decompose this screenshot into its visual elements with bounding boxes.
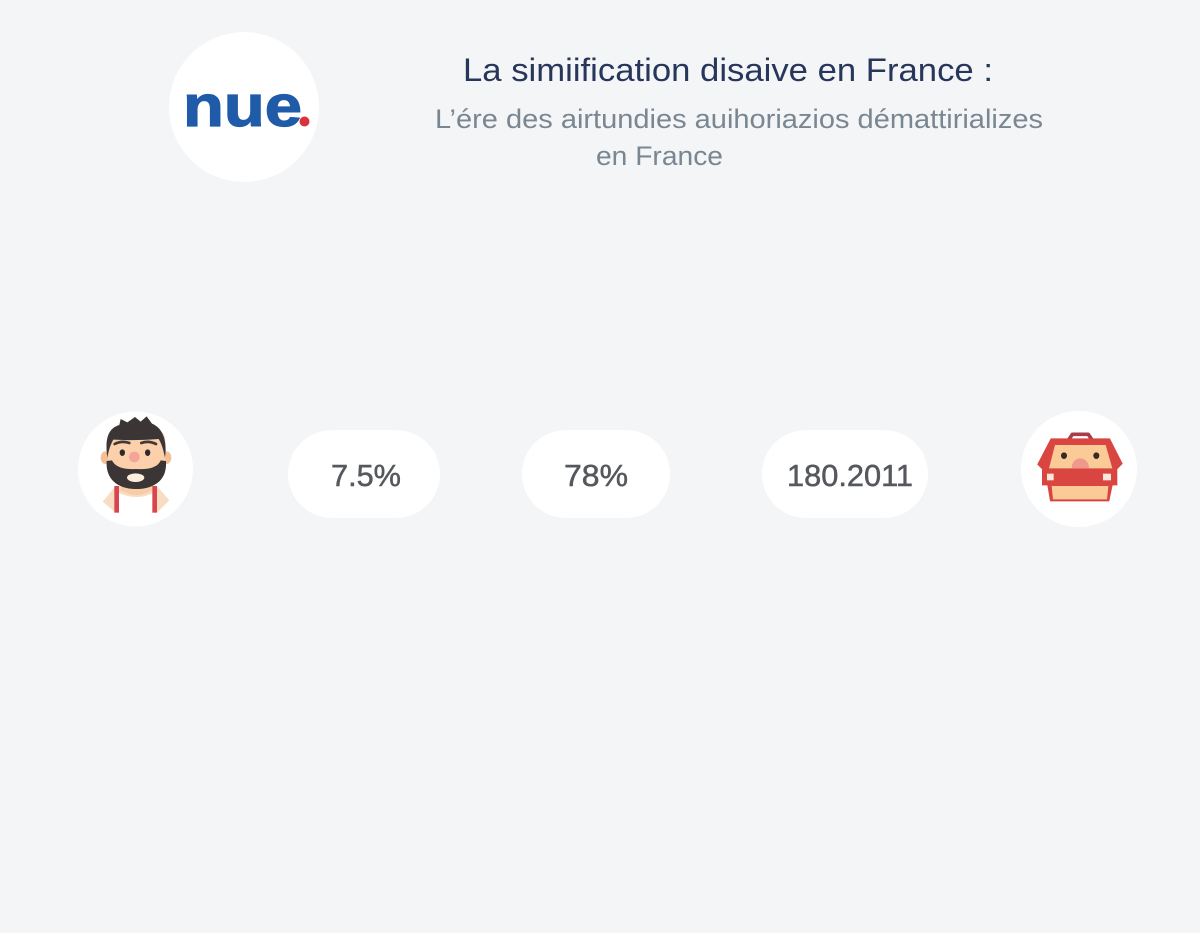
stat pill: 180.2011 [762,430,928,518]
subtitle: L’ére des airtundies auihoriazios démattirializes [435,104,1043,134]
title: La simiification disaive en France : [463,52,993,88]
logo: nue badge [169,32,319,182]
logo: nue badge: nue [183,74,302,139]
stat pill: 7.5%: 7.5% [331,458,401,493]
icon: red toolbox with face [1021,411,1137,527]
stat pill: 78% [522,430,670,518]
stat pill: 78%: 78% [564,458,628,493]
stat pill: 180.2011: 180.2011 [787,458,913,493]
stat pill: 7.5% [288,430,440,518]
icon: bearded man [78,412,193,526]
subtitle [435,104,1043,171]
subtitle: en France [596,141,723,171]
